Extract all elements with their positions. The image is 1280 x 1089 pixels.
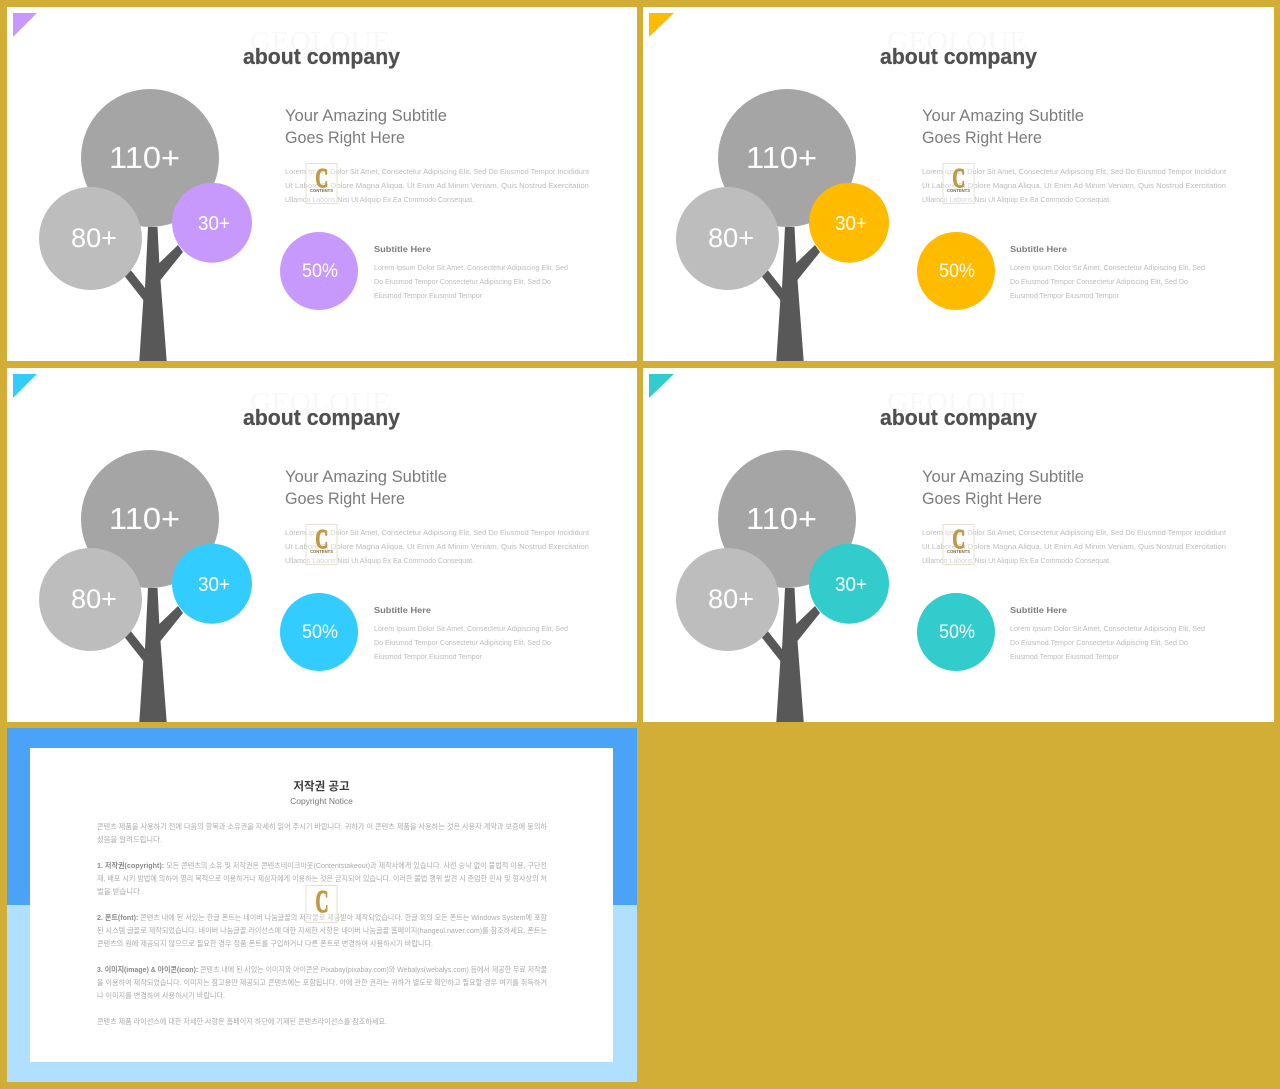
- tree chart: 30+: [835, 213, 867, 235]
- percent badge: [280, 593, 358, 671]
- copyright section 2: [97, 912, 547, 948]
- icon: corner triangle: [649, 13, 674, 37]
- copyright section 2: 콘텐츠의 원에 제공되지 않으므로 필요한 경우 정품 폰트를 구입하거나 다른 폰트로 변경하여 사용하시기 바랍니다.: [97, 938, 433, 948]
- body text: Ullamco Laboris Nisi Ut Aliquip Ex Ea Commodo Consequat.: [922, 556, 1111, 565]
- panel: copyright notice: [7, 728, 637, 1082]
- tree chart: 80+: [708, 223, 754, 253]
- heading: GEOLOUE: [887, 387, 1027, 417]
- percent badge: 50%: [939, 261, 975, 282]
- detail text: Eiusmod Tempor Eiusmod Tempor: [1010, 291, 1120, 300]
- subtitle: Goes Right Here: [285, 129, 405, 147]
- tree chart: 80+: [71, 223, 117, 253]
- tree chart: 80+: [71, 584, 117, 614]
- percent badge: [280, 232, 358, 310]
- logo watermark: [306, 524, 337, 564]
- tree chart: 110+: [109, 140, 180, 175]
- copyright section 2: 2. 폰트(font): 콘텐츠 내에 된 서있는 한글 폰트는 네이버 나눔글꼴의 저작물로 제공받아 제작되었습니다. 한글 외의 모든 폰트는 Windows System에 포함: [97, 912, 547, 922]
- detail text: Lorem Ipsum Dolor Sit Amet, Consectetur Adipiscing Elit, Sed: [1010, 624, 1205, 633]
- heading: [243, 26, 400, 69]
- copyright section 3: 3. 이미지(image) & 아이콘(icon): 콘텐츠 내에 된 사있는 이미지와 아이콘은 Pixabay(pixabay.com)와 Webalys(webalys.com) 등에서 제공한 무료 저작물: [97, 964, 547, 974]
- tree chart: [39, 89, 252, 361]
- panel: slide orange: [643, 7, 1274, 361]
- percent badge: [917, 232, 995, 310]
- icon: corner triangle: [649, 374, 674, 398]
- logo watermark: C: [316, 163, 328, 193]
- body text: [285, 528, 589, 565]
- logo watermark: C: [316, 524, 328, 554]
- icon: corner triangle: [13, 13, 37, 37]
- tree chart: [676, 89, 889, 361]
- body text: Ullamco Laboris Nisi Ut Aliquip Ex Ea Commodo Consequat.: [285, 195, 474, 204]
- logo watermark: CONTENTS: [947, 549, 970, 554]
- tree chart: 110+: [746, 140, 817, 175]
- subtitle: Your Amazing Subtitle: [922, 107, 1084, 125]
- copyright intro: [97, 821, 547, 844]
- body text: Lorem Ipsum Dolor Sit Amet, Consectetur Adipiscing Elit, Sed Do Eiusmod Tempor Incididunt: [285, 528, 589, 537]
- panel: slide blue: [7, 368, 637, 722]
- icon: corner triangle: [13, 374, 37, 398]
- copyright section 2: 된 시스템 글꼴로 제작되었습니다. 네이버 나눔글꼴 라이선스에 대한 자세한 사항은 네이버 나눔글꼴 홈페이지(hangeul.naver.com)를 참조하세요. 폰트는: [97, 925, 547, 935]
- detail text: Do Eiusmod Tempor Consectetur Adipiscing Elit, Sed Do: [374, 277, 551, 286]
- body text: [922, 167, 1226, 204]
- copyright section 3: 나 이미지를 변경하여 사용하시기 바랍니다.: [97, 990, 225, 1000]
- body text: Lorem Ipsum Dolor Sit Amet, Consectetur Adipiscing Elit, Sed Do Eiusmod Tempor Incididunt: [285, 167, 589, 176]
- subtitle: Goes Right Here: [922, 490, 1042, 508]
- copyright heading: Copyright Notice: [290, 796, 353, 806]
- copyright section 1: [97, 860, 547, 896]
- heading: about company: [243, 44, 400, 69]
- subtitle: Your Amazing Subtitle: [922, 468, 1084, 486]
- subtitle: Goes Right Here: [285, 490, 405, 508]
- subtitle: [285, 107, 447, 147]
- subtitle: [922, 107, 1084, 147]
- detail text: Lorem Ipsum Dolor Sit Amet, Consectetur Adipiscing Elit, Sed: [374, 263, 568, 272]
- panel: slide teal: [643, 368, 1274, 722]
- copyright section 1: 벌을 받습니다.: [97, 886, 142, 896]
- tree chart: 110+: [109, 501, 180, 536]
- logo watermark: CONTENTS: [947, 188, 970, 193]
- detail text: Eiusmod Tempor Eiusmod Tempor: [374, 652, 483, 661]
- heading: GEOLOUE: [887, 26, 1027, 56]
- percent badge: 50%: [939, 622, 975, 643]
- copyright heading: 저작권 공고: [293, 779, 350, 793]
- tree chart: 30+: [198, 213, 230, 235]
- tree chart: [39, 450, 252, 722]
- detail text: [1010, 605, 1205, 661]
- detail text: [374, 244, 568, 300]
- logo watermark: C: [316, 883, 328, 919]
- heading: GEOLOUE: [250, 26, 390, 56]
- logo watermark: C: [952, 524, 965, 554]
- copyright intro: 콘텐츠 제품을 사용하기 전에 다음의 항목과 소유권을 자세히 읽어 주시기 바랍니다. 귀하가 이 콘텐츠 제품을 사용하는 것은 사용자 계약과 보증에 동의하: [97, 821, 547, 831]
- body text: Ut Labore Et Dolore Magna Aliqua. Ut Enim Ad Minim Veniam, Quis Nostrud Exercitation: [285, 542, 589, 551]
- detail text: Subtitle Here: [374, 244, 431, 254]
- body text: Ullamco Laboris Nisi Ut Aliquip Ex Ea Commodo Consequat.: [285, 556, 474, 565]
- copyright section 3: [97, 964, 547, 1000]
- body text: Ut Labore Et Dolore Magna Aliqua. Ut Enim Ad Minim Veniam, Quis Nostrud Exercitation: [285, 181, 589, 190]
- detail text: Subtitle Here: [374, 605, 431, 615]
- tree chart: [676, 450, 889, 722]
- heading: [243, 387, 400, 430]
- logo watermark: CONTENTS: [310, 188, 333, 193]
- body text: [285, 167, 589, 204]
- logo watermark: [306, 883, 337, 922]
- subtitle: Goes Right Here: [922, 129, 1042, 147]
- tree chart: 30+: [198, 574, 230, 596]
- copyright footer line: 콘텐츠 제품 라이선스에 대한 자세한 사항은 홈페이지 하단에 기재된 콘텐츠라이선스를 참조하세요.: [97, 1016, 387, 1026]
- subtitle: Your Amazing Subtitle: [285, 468, 447, 486]
- detail text: Lorem Ipsum Dolor Sit Amet, Consectetur Adipiscing Elit, Sed: [1010, 263, 1205, 272]
- copyright section 3: 을 이용하여 제작되었습니다. 이미지는 참고용만 제공되고 콘텐츠에는 포함됩니다. 이에 관한 권리는 귀하가 별도로 확인하고 필요할 경우 여기를 취득하거: [97, 977, 547, 987]
- percent badge: [917, 593, 995, 671]
- percent badge: 50%: [302, 261, 338, 282]
- heading: about company: [880, 405, 1037, 430]
- logo watermark: [943, 163, 974, 204]
- heading: GEOLOUE: [250, 387, 390, 417]
- tree chart: 30+: [835, 574, 867, 596]
- body text: Ut Labore Et Dolore Magna Aliqua. Ut Enim Ad Minim Veniam, Quis Nostrud Exercitation: [922, 181, 1226, 190]
- subtitle: [922, 468, 1084, 508]
- percent badge: 50%: [302, 622, 338, 643]
- logo watermark: C: [952, 163, 965, 193]
- body text: Ut Labore Et Dolore Magna Aliqua. Ut Enim Ad Minim Veniam, Quis Nostrud Exercitation: [922, 542, 1226, 551]
- subtitle: [285, 468, 447, 508]
- tree chart: 80+: [708, 584, 754, 614]
- copyright section 1: 재, 배포 시키 방법에 의하여 영리 목적으로 이용하거나 제삼자에게 이용하는 것은 금지되어 있습니다. 이러한 불법 행위 발견 시 준엄한 민사 및 형사상의 처: [97, 873, 547, 883]
- detail text: Do Eiusmod Tempor Consectetur Adipiscing Elit, Sed Do: [1010, 638, 1188, 647]
- body text: Lorem Ipsum Dolor Sit Amet, Consectetur Adipiscing Elit, Sed Do Eiusmod Tempor Incididunt: [922, 167, 1226, 176]
- detail text: Do Eiusmod Tempor Consectetur Adipiscing Elit, Sed Do: [1010, 277, 1188, 286]
- logo watermark: [306, 163, 337, 204]
- copyright intro: 셨음을 알려드립니다.: [97, 834, 162, 844]
- body text: [922, 528, 1226, 565]
- logo watermark: CONTENTS: [310, 549, 333, 554]
- body text: Lorem Ipsum Dolor Sit Amet, Consectetur Adipiscing Elit, Sed Do Eiusmod Tempor Incididunt: [922, 528, 1226, 537]
- detail text: Do Eiusmod Tempor Consectetur Adipiscing Elit, Sed Do: [374, 638, 551, 647]
- heading: [880, 387, 1037, 430]
- copyright section 1: 1. 저작권(copyright): 모든 콘텐츠의 소유 및 저작권은 콘텐츠테이크아웃(Contentstakeout)과 제작사에게 있습니다. 사전 승낙 없이 불법적 이용, 구단전: [97, 860, 547, 870]
- detail text: Subtitle Here: [1010, 244, 1067, 254]
- subtitle: Your Amazing Subtitle: [285, 107, 447, 125]
- detail text: Eiusmod Tempor Eiusmod Tempor: [374, 291, 483, 300]
- detail text: Lorem Ipsum Dolor Sit Amet, Consectetur Adipiscing Elit, Sed: [374, 624, 568, 633]
- detail text: Eiusmod Tempor Eiusmod Tempor: [1010, 652, 1120, 661]
- heading: [880, 26, 1037, 69]
- detail text: Subtitle Here: [1010, 605, 1067, 615]
- tree chart: 110+: [746, 501, 817, 536]
- body text: Ullamco Laboris Nisi Ut Aliquip Ex Ea Commodo Consequat.: [922, 195, 1111, 204]
- panel: slide purple: [7, 7, 637, 361]
- heading: about company: [243, 405, 400, 430]
- heading: about company: [880, 44, 1037, 69]
- copyright heading: [290, 779, 353, 806]
- detail text: [1010, 244, 1205, 300]
- detail text: [374, 605, 568, 661]
- logo watermark: [943, 524, 974, 564]
